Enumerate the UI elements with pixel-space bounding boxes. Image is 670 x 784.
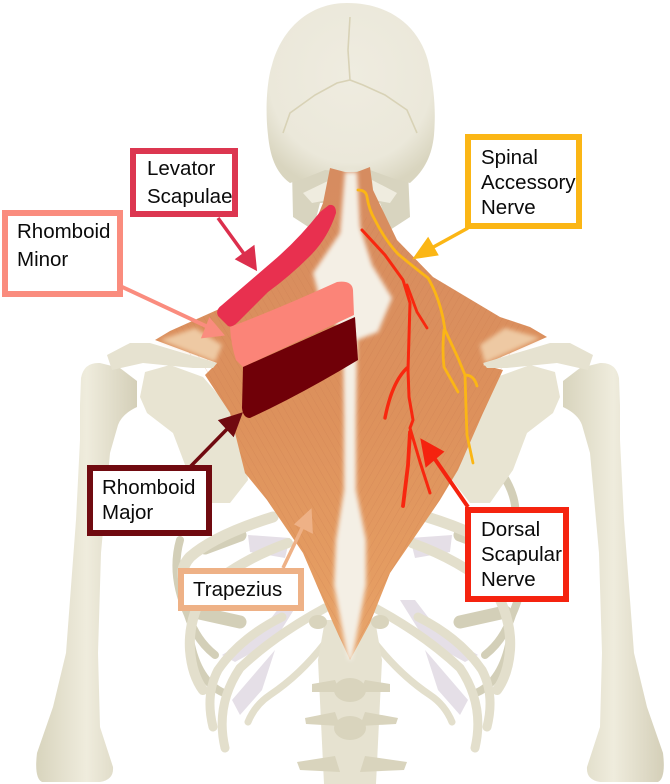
- label: Levator Scapulae: Levator: [147, 157, 216, 180]
- central tendon: [313, 172, 392, 660]
- label: Dorsal Scapular Nerve: Scapular: [481, 543, 562, 566]
- mandible and neck bones: [292, 170, 410, 230]
- right ribs: [375, 475, 524, 748]
- label: Rhomboid Major: Rhomboid: [102, 476, 195, 499]
- label: Trapezius: Trapezius: [193, 578, 282, 601]
- label: Spinal Accessory Nerve: Nerve: [481, 196, 536, 219]
- muscle: rhomboid minor: [230, 282, 354, 367]
- skull sutures: [283, 17, 417, 133]
- shoulder tendon right: [480, 328, 540, 363]
- nerve: dorsal scapular: [362, 230, 430, 506]
- label: Spinal Accessory Nerve: Accessory: [481, 171, 576, 194]
- label: Rhomboid Minor: Minor: [17, 248, 68, 271]
- right humerus: [563, 363, 664, 782]
- spine: [297, 615, 407, 784]
- label: Spinal Accessory Nerve: [416, 137, 579, 257]
- arrow: spinal accessory nerve: [416, 228, 468, 257]
- label: Dorsal Scapular Nerve: [423, 442, 566, 599]
- arrow: levator scapulae: [218, 218, 255, 268]
- label: Rhomboid Minor: Rhomboid: [17, 220, 110, 243]
- muscle: levator scapulae: [217, 205, 336, 326]
- label: Spinal Accessory Nerve: Spinal: [481, 146, 538, 169]
- arrow: trapezius: [283, 512, 311, 568]
- label: Dorsal Scapular Nerve: Dorsal: [481, 518, 540, 541]
- label: Levator Scapulae: [133, 151, 255, 268]
- right acromion: [483, 343, 593, 370]
- left acromion: [107, 343, 217, 370]
- back rib arcs: [176, 475, 240, 693]
- pleura shading: [222, 535, 478, 715]
- skull: [267, 3, 435, 183]
- left humerus: [36, 363, 137, 782]
- arrow: dorsal scapular nerve: [423, 442, 468, 507]
- rib cage: [176, 475, 524, 748]
- shoulder tendon left: [160, 328, 222, 362]
- left ribs: [176, 475, 325, 748]
- trapezius muscle: [155, 167, 547, 660]
- muscle: rhomboid major: [242, 317, 358, 418]
- label: Trapezius: [181, 512, 311, 608]
- label: Dorsal Scapular Nerve: Nerve: [481, 568, 536, 591]
- label: Rhomboid Major: Major: [102, 501, 153, 524]
- left scapula: [140, 365, 248, 503]
- arrow: rhomboid major: [190, 415, 240, 467]
- right scapula: [452, 365, 560, 503]
- label: Rhomboid Minor: [5, 213, 221, 336]
- label: Levator Scapulae: Scapulae: [147, 185, 232, 208]
- arrow: rhomboid minor: [118, 285, 221, 336]
- label: Rhomboid Major: [90, 415, 240, 533]
- nerve: spinal accessory: [358, 190, 477, 463]
